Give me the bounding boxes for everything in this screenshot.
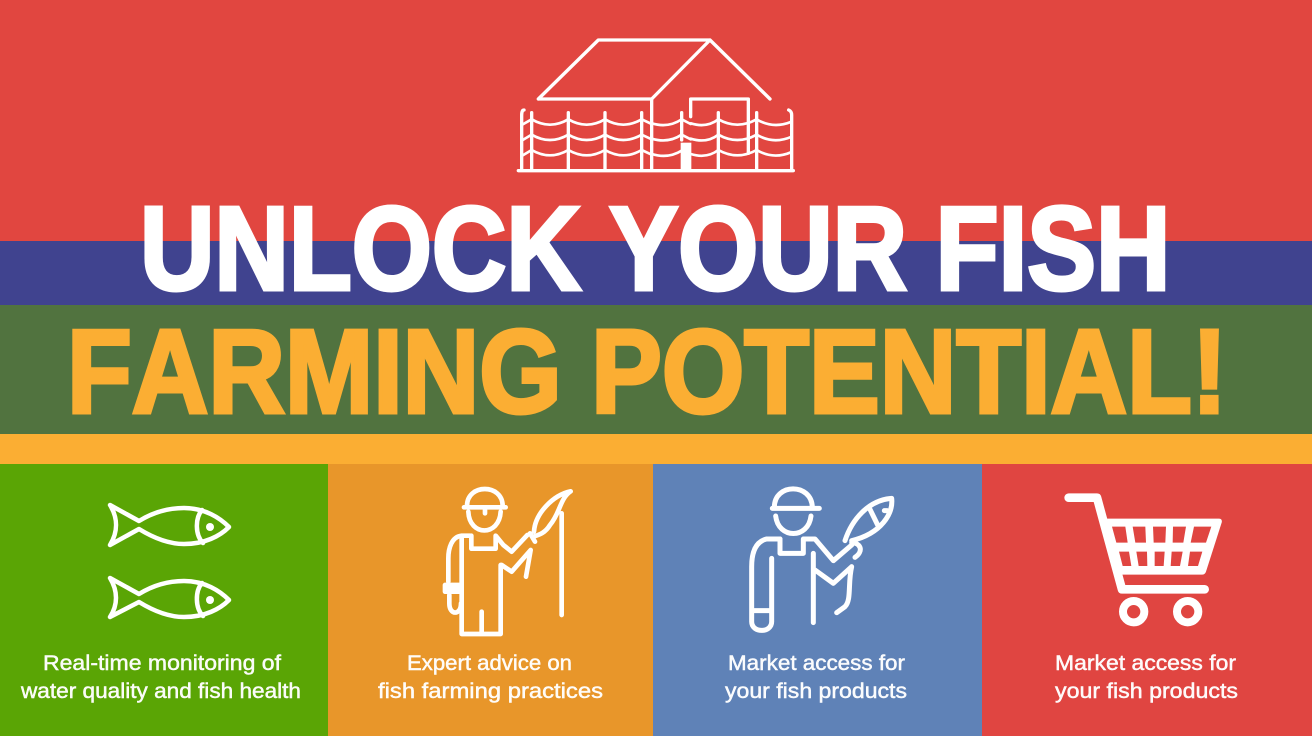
- caption: [378, 652, 603, 703]
- background band: red: [0, 0, 1312, 241]
- caption: fish farming practices: [378, 680, 603, 703]
- icon: farmer with fishing rod: [445, 489, 571, 634]
- caption: [725, 652, 907, 703]
- caption: water quality and fish health: [20, 680, 301, 703]
- caption: Market access for: [1055, 652, 1236, 675]
- background band: blue: [0, 241, 1312, 305]
- icon: shopping cart: [1069, 498, 1222, 622]
- panel: expert advice: [328, 464, 653, 736]
- background band: green: [0, 305, 1312, 434]
- caption: Expert advice on: [407, 652, 572, 675]
- caption: Real-time monitoring of: [43, 652, 281, 675]
- background band: yellow: [0, 434, 1312, 464]
- icon: farmer holding fish: [752, 489, 892, 630]
- title line 2: FARMING POTENTIAL!: [67, 305, 1227, 438]
- panel: market access red: [982, 464, 1312, 736]
- caption: Market access for: [728, 652, 905, 675]
- title line 1: UNLOCK YOUR FISH: [140, 182, 1170, 315]
- panel: market access blue: [653, 464, 982, 736]
- caption: [20, 652, 301, 703]
- caption: your fish products: [725, 680, 907, 703]
- caption: your fish products: [1055, 680, 1238, 703]
- panel: real-time monitoring: [0, 464, 328, 736]
- icon: fish farm house with fence: [518, 40, 793, 171]
- caption: [1055, 652, 1238, 703]
- icon: two fish: [110, 505, 229, 617]
